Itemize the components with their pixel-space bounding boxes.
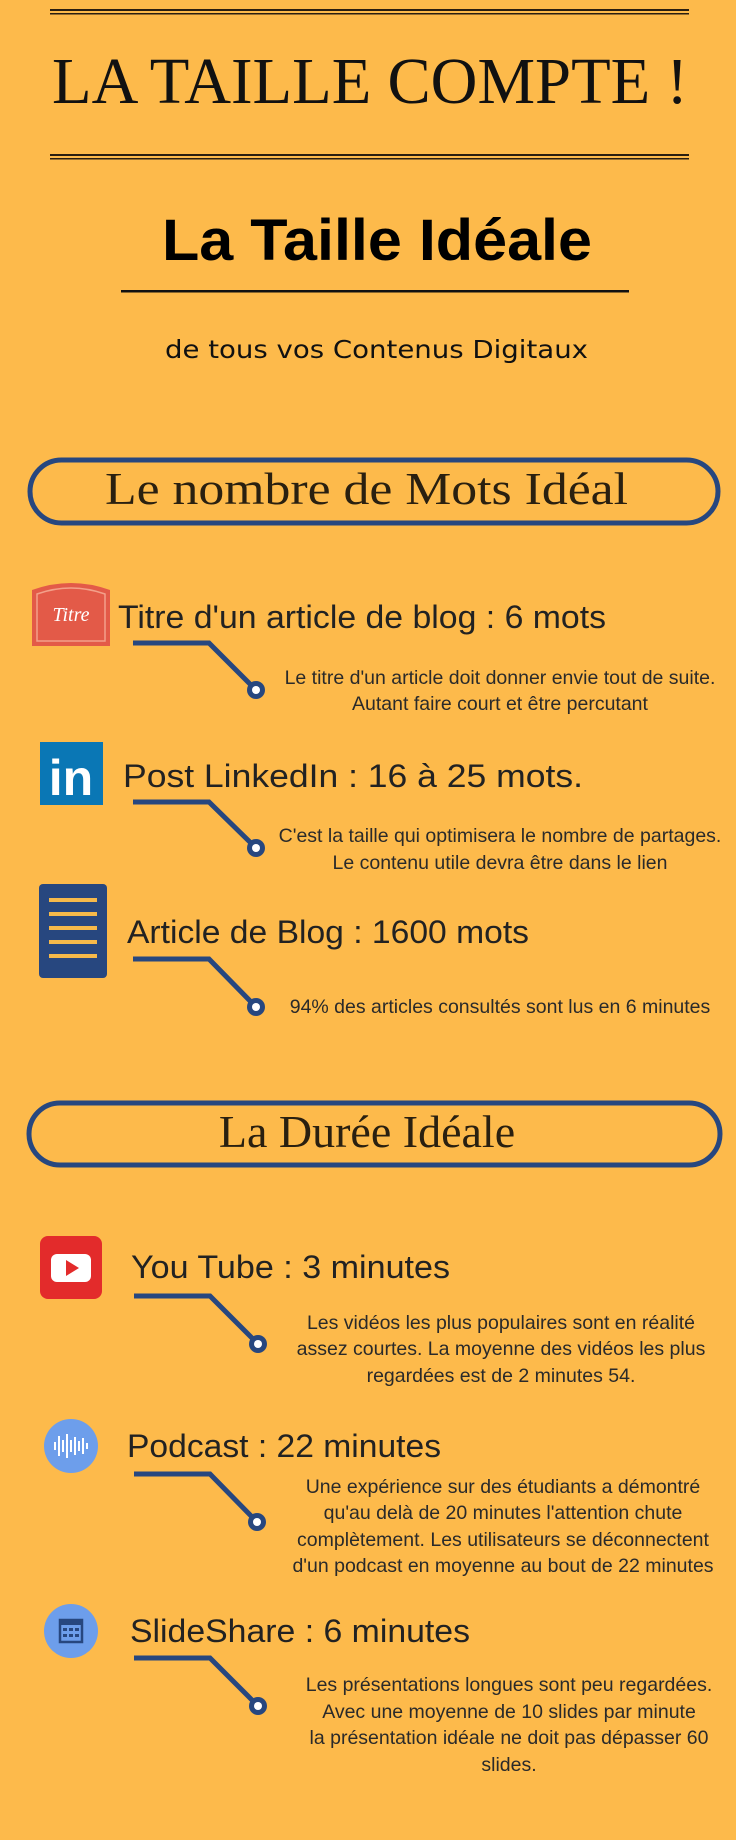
connector (133, 643, 265, 699)
item: titre blog (32, 583, 715, 715)
pill heading: mots: Le nombre de Mots Idéal (105, 463, 628, 514)
item: podcast: Une expérience sur des étudiants a démontré (306, 1476, 700, 1498)
icon: slides (44, 1604, 98, 1658)
subtitle heading: La Taille Idéale (162, 208, 592, 273)
icon: podcast wave (44, 1419, 98, 1473)
item: titre blog: Autant faire court et être percutant (352, 693, 649, 715)
tagline: de tous vos Contenus Digitaux (165, 335, 588, 364)
item: podcast (44, 1419, 714, 1577)
connector (133, 959, 265, 1016)
item: youtube: regardées est de 2 minutes 54. (367, 1365, 635, 1387)
item: linkedin: Le contenu utile devra être dans le lien (333, 852, 667, 874)
connector (134, 1474, 266, 1531)
item: slideshare: Les présentations longues sont peu regardées. (306, 1674, 712, 1696)
connector (134, 1296, 267, 1353)
item: slideshare: Avec une moyenne de 10 slides par minute (322, 1701, 696, 1723)
item: article: Article de Blog : 1600 mots (127, 914, 529, 950)
item: podcast: d'un podcast en moyenne au bout de 22 minutes (292, 1555, 714, 1577)
item: linkedin: Post LinkedIn : 16 à 25 mots. (123, 758, 583, 794)
item: titre blog: Le titre d'un article doit donner envie tout de suite. (285, 667, 715, 689)
item: youtube (40, 1236, 706, 1387)
item: youtube: Les vidéos les plus populaires sont en réalité (307, 1312, 695, 1334)
pill heading: mots (30, 460, 718, 523)
pill heading: durée (29, 1103, 720, 1165)
header double rule bottom (50, 154, 689, 160)
icon: titre badge: Titre (52, 604, 90, 626)
icon: titre badge (32, 583, 110, 646)
icon: linkedin: in (49, 750, 93, 806)
pill heading: durée: La Durée Idéale (219, 1106, 515, 1157)
item: podcast: qu'au delà de 20 minutes l'attention chute (324, 1502, 682, 1524)
connector (133, 802, 265, 857)
item: article (39, 884, 711, 1018)
item: slideshare: slides. (481, 1754, 537, 1776)
item: linkedin (40, 742, 721, 874)
title: LA TAILLE COMPTE ! (52, 45, 688, 118)
icon: youtube (40, 1236, 102, 1299)
item: article: 94% des articles consultés sont lus en 6 minutes (290, 996, 711, 1018)
item: podcast: complètement. Les utilisateurs se déconnectent (297, 1529, 710, 1551)
item: youtube: You Tube : 3 minutes (131, 1249, 450, 1285)
item: slideshare: SlideShare : 6 minutes (130, 1613, 470, 1649)
item: slideshare (44, 1604, 712, 1776)
icon: document (39, 884, 107, 978)
item: youtube: assez courtes. La moyenne des vidéos les plus (297, 1338, 706, 1360)
item: titre blog: Titre d'un article de blog : 6 mots (118, 599, 606, 635)
item: slideshare: la présentation idéale ne doit pas dépasser 60 (310, 1727, 709, 1749)
item: podcast: Podcast : 22 minutes (127, 1428, 441, 1464)
header double rule top (50, 9, 689, 14)
item: linkedin: C'est la taille qui optimisera le nombre de partages. (279, 825, 721, 847)
icon: linkedin (40, 742, 103, 806)
connector (134, 1658, 267, 1715)
